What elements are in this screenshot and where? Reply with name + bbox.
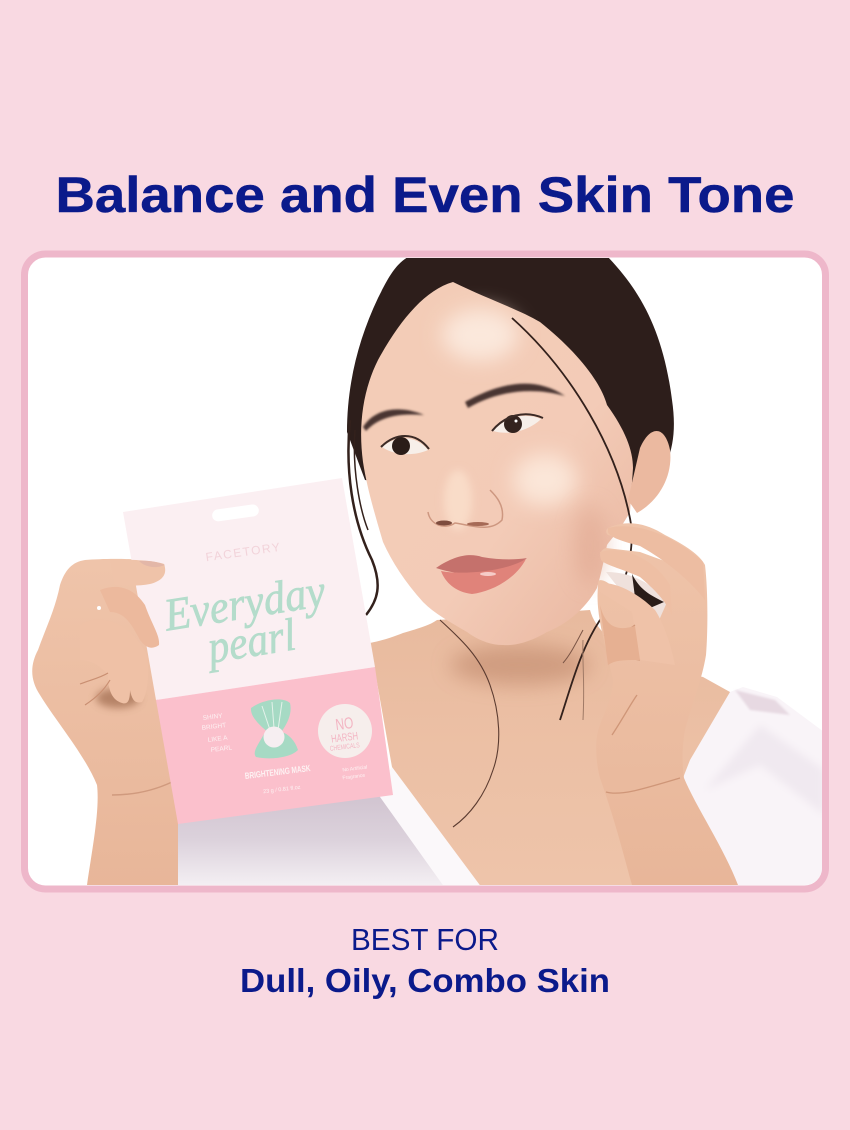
right eye <box>492 414 543 433</box>
right eyebrow <box>465 384 565 408</box>
wrist crease <box>112 782 172 795</box>
left eye <box>381 436 429 455</box>
claims: No Artificial <box>342 765 368 774</box>
shirt <box>175 687 824 890</box>
hand recess shading <box>96 688 140 708</box>
gap between fingers <box>606 572 666 618</box>
neck shadow <box>450 645 590 685</box>
creases <box>604 625 680 793</box>
icon: pearl shell <box>251 699 298 758</box>
mask packet: Fragrance <box>342 773 366 781</box>
side text: BRIGHT <box>201 722 227 732</box>
text: best for: BEST FOR <box>351 922 499 957</box>
hair back <box>347 255 674 500</box>
face highlights and shading <box>442 309 606 585</box>
title: Balance and Even Skin Tone <box>56 167 794 223</box>
photo: woman holding mask <box>32 255 824 890</box>
packet top <box>123 478 375 700</box>
lips <box>436 555 527 594</box>
badge: NO <box>334 715 354 734</box>
panel: photo <box>24 254 826 890</box>
product name <box>166 580 324 674</box>
nose <box>428 490 503 527</box>
side text: PEARL <box>210 744 233 754</box>
badge <box>318 704 372 758</box>
forearm and hand: left <box>32 559 178 885</box>
side text: SHINY <box>202 713 224 722</box>
net weight: 23 g / 0.81 fl.oz <box>263 785 301 795</box>
product name: Everyday <box>160 565 329 641</box>
side text: LIKE A <box>207 735 229 744</box>
ear <box>628 431 670 513</box>
hand and forearm: right <box>596 523 738 885</box>
mask type: BRIGHTENING MASK <box>244 763 311 781</box>
fingers on packet <box>80 560 165 705</box>
packet bottom <box>156 667 393 824</box>
text: skin types: Dull, Oily, Combo Skin <box>240 962 610 999</box>
badge: HARSH <box>331 730 359 746</box>
badge: CHEMICALS <box>330 742 360 753</box>
chest and neck <box>370 610 730 888</box>
side text <box>202 713 232 752</box>
hang hole <box>212 504 259 522</box>
hair strands <box>348 318 632 827</box>
fingers <box>609 584 660 660</box>
brand: FACETORY <box>205 540 282 564</box>
face <box>361 282 633 645</box>
left eyebrow <box>363 409 424 431</box>
mask packet <box>123 478 393 824</box>
product name: pearl <box>201 609 299 673</box>
